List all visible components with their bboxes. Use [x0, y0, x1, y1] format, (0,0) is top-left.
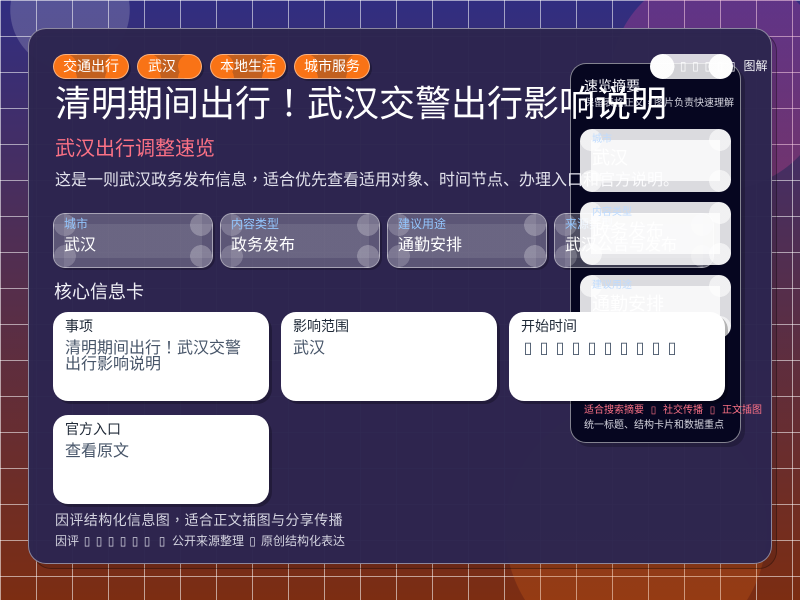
tag chip: city service [294, 54, 370, 79]
footer credit: ▯ [120, 532, 126, 549]
tag chip: Wuhan [137, 54, 202, 79]
info card: start time: ▯ [636, 334, 644, 358]
stat card: content type: 政务发布 [231, 231, 295, 255]
footer credit: ▯ [132, 532, 138, 549]
top-right badge: ▯ [717, 57, 723, 74]
sidebar description: 保留表格正文，图片负责快速理解 [584, 94, 734, 109]
sidebar card: suggested use [580, 275, 731, 338]
title: 清明期间出行！武汉交警出行影响说明 [55, 75, 667, 127]
stat card: source [554, 213, 714, 268]
tag chip: local life: 本地生活 [220, 56, 276, 76]
top-right badge: ▯ [692, 57, 699, 74]
info card: official entry: 官方入口 [65, 419, 121, 439]
sidebar card: city: 城市 [592, 130, 612, 145]
panel: sidebar summary [570, 63, 741, 443]
stat card: content type: 内容类型 [231, 215, 279, 232]
footer credit: ▯ [84, 532, 90, 549]
info card: start time: ▯ [652, 334, 660, 358]
decorative circle top left [10, 0, 130, 70]
sidebar card: suggested use: 建议用途 [592, 276, 632, 291]
info card: item: 事项 [65, 316, 93, 336]
info card: official entry: 查看原文 [65, 437, 129, 461]
footer credit: ▯ [249, 532, 256, 549]
info card: start time: ▯ [540, 334, 548, 358]
top-right badge: ▯ [680, 57, 686, 74]
footer credit: 因评 公开来源整理 原创结构化表达 [55, 532, 345, 549]
tag chip: traffic: 交通出行 [63, 56, 119, 76]
footer credit: ▯ [144, 532, 150, 549]
sidebar card: content type: 内容类型 [592, 203, 632, 218]
sidebar card: suggested use: 通勤安排 [592, 290, 664, 316]
tag chip: local life [210, 54, 286, 79]
info card: start time: ▯ [572, 334, 580, 358]
top-right badge: 图解 [743, 57, 768, 74]
tag chip: city service: 城市服务 [304, 56, 360, 76]
sidebar card: city: 武汉 [592, 144, 628, 170]
stat card: city: 城市 [64, 215, 88, 232]
sidebar tags line: ▯ [651, 401, 656, 416]
tag chip: Wuhan: 武汉 [148, 56, 176, 76]
info card: start time: ▯ [668, 334, 676, 358]
info card: start time [509, 312, 725, 401]
stat card: city: 武汉 [64, 231, 96, 255]
section heading: 核心信息卡 [54, 278, 144, 304]
subtitle: 武汉出行调整速览 [55, 132, 215, 161]
tag chip: traffic [53, 54, 129, 79]
info card: start time: ▯ [588, 334, 596, 358]
footer credit: ▯ [96, 532, 102, 549]
info card: scope: 影响范围 [293, 316, 349, 336]
info card: official entry [53, 415, 269, 504]
stat card: suggested use [387, 213, 547, 268]
sidebar heading: 速览摘要 [584, 76, 640, 96]
stat card: source: 来源类型 [565, 215, 613, 232]
sidebar card: city [580, 129, 731, 192]
info card: scope [281, 312, 497, 401]
stat card: suggested use: 建议用途 [398, 215, 446, 232]
info card: start time: ▯ [620, 334, 628, 358]
decorative circle top right [610, 0, 800, 190]
info card: start time: 开始时间 [521, 316, 577, 336]
info card: start time: ▯ [556, 334, 564, 358]
sidebar tags line: 适合搜索摘要 社交传播 正文插图 [584, 401, 762, 416]
footer line: 因评结构化信息图，适合正文插图与分享传播 [55, 510, 343, 530]
info card: scope: 武汉 [293, 334, 325, 358]
top-right badge: ▯ [704, 57, 711, 74]
decorative circle bottom [505, 400, 767, 600]
top-right badge: ▯ [729, 57, 736, 74]
top-right badge [650, 54, 768, 79]
description: 这是一则武汉政务发布信息，适合优先查看适用对象、时间节点、办理入口和官方说明。 [55, 166, 679, 190]
info card: start time: ▯ [604, 334, 612, 358]
sidebar card: content type: 政务发布 [592, 217, 664, 243]
sidebar note: 统一标题、结构卡片和数据重点 [584, 416, 724, 431]
stat card: city [53, 213, 213, 268]
stat card: content type [220, 213, 380, 268]
stat card: suggested use: 通勤安排 [398, 231, 462, 255]
sidebar tags line: ▯ [710, 401, 715, 416]
sidebar card: content type [580, 202, 731, 265]
footer credit: ▯ [159, 532, 165, 549]
stat card: source: 武汉公告与发布 [565, 231, 677, 255]
info card: start time: ▯ [524, 334, 532, 358]
info card: item: 清明期间出行！武汉交警出行影响说明 [65, 334, 241, 374]
footer credit: ▯ [108, 532, 114, 549]
info card: item [53, 312, 269, 401]
